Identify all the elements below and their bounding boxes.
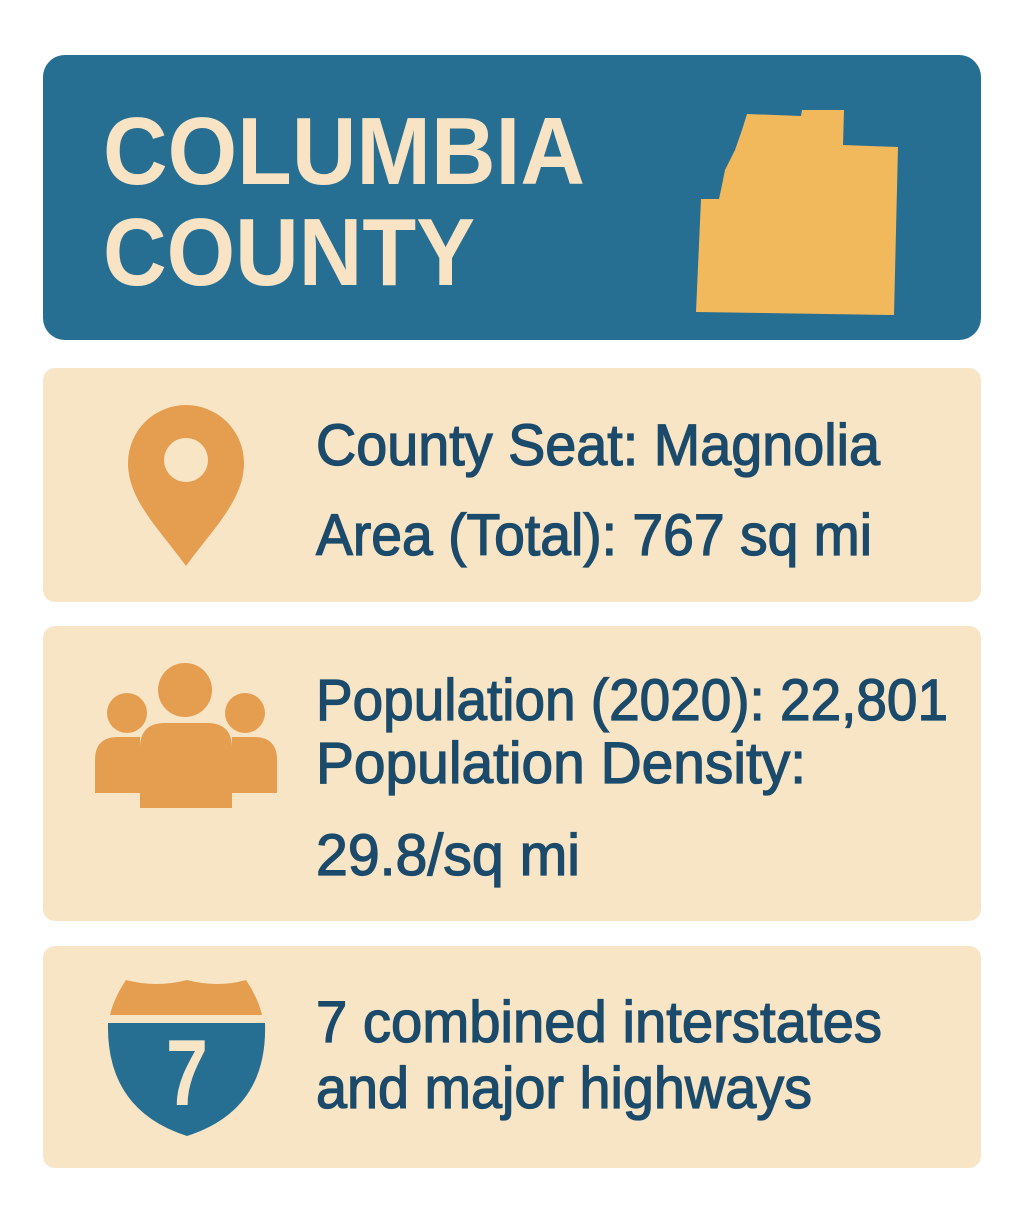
text: population: Population Density: bbox=[316, 731, 806, 796]
text: seat and area: Area (Total): 767 sq mi bbox=[316, 503, 872, 568]
panel: title banner bbox=[43, 55, 981, 340]
text: population: Population (2020): 22,801 bbox=[316, 668, 948, 733]
text: seat and area bbox=[316, 413, 881, 568]
title: COUNTY bbox=[103, 199, 475, 306]
panel: seat and area bbox=[43, 368, 981, 602]
panel: highways bbox=[43, 946, 981, 1168]
icon: people bbox=[95, 663, 277, 808]
text: seat and area: County Seat: Magnolia bbox=[316, 413, 881, 478]
text: highways: and major highways bbox=[316, 1056, 812, 1121]
title bbox=[103, 98, 585, 306]
icon: interstate shield: 7 bbox=[166, 1020, 208, 1125]
icon: interstate shield bbox=[108, 980, 265, 1136]
title: COLUMBIA bbox=[103, 98, 585, 205]
text: highways bbox=[316, 990, 882, 1121]
icon: county map bbox=[696, 110, 898, 315]
text: population: 29.8/sq mi bbox=[316, 823, 580, 888]
text: highways: 7 combined interstates bbox=[316, 990, 882, 1055]
text: population bbox=[316, 668, 948, 888]
panel: population bbox=[43, 626, 981, 921]
icon: location pin bbox=[128, 405, 244, 566]
